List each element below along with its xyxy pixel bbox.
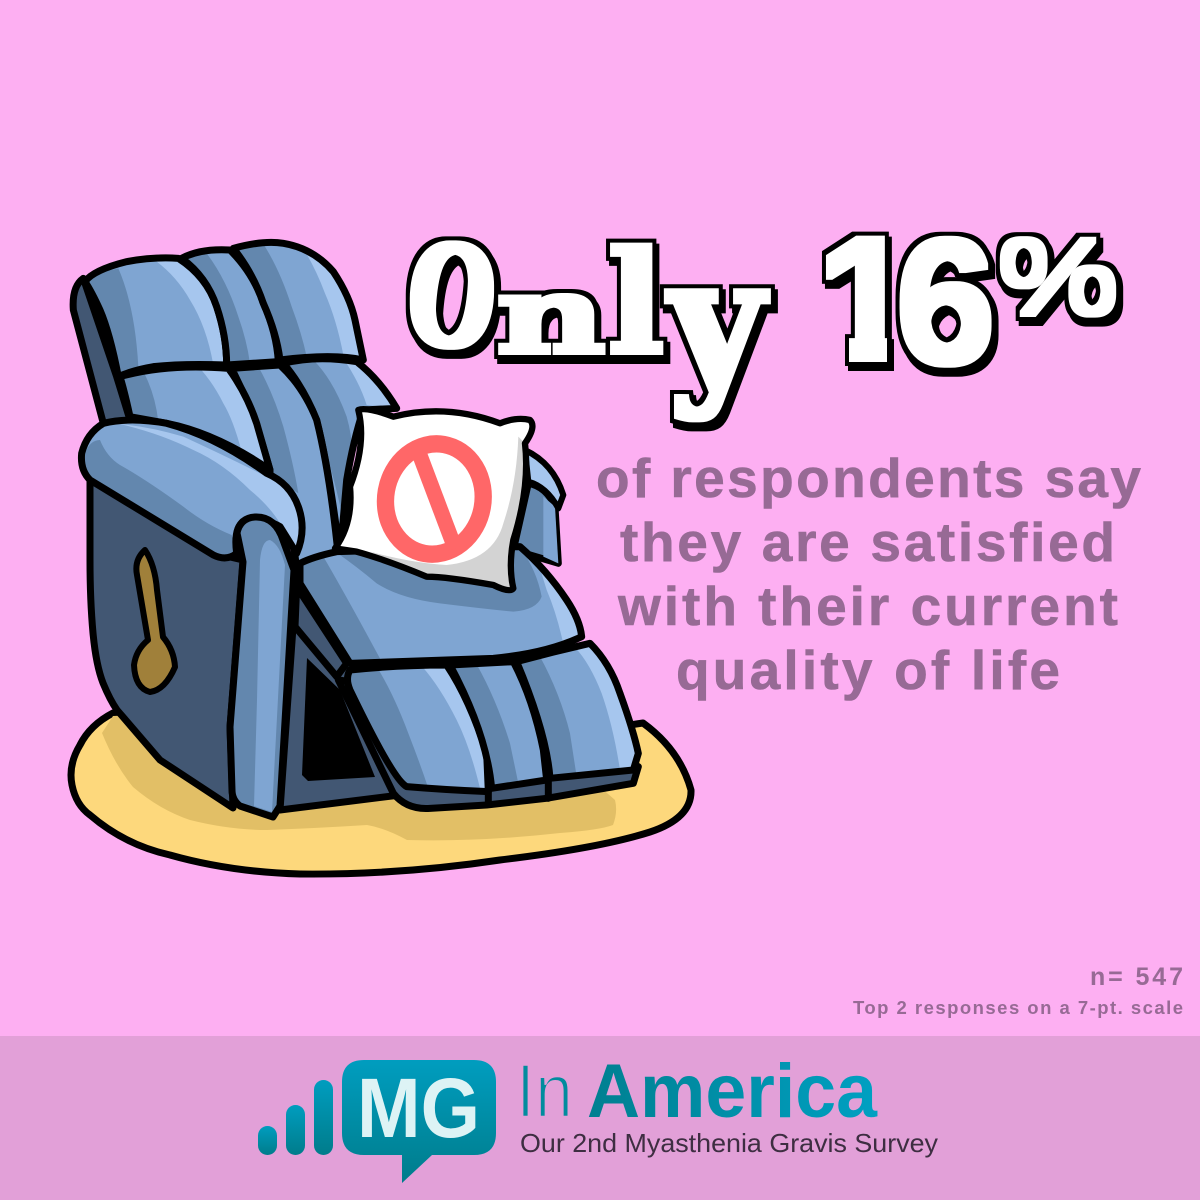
- sample size note: [853, 963, 1183, 1018]
- illustration: recliner chair on rug: [71, 242, 691, 874]
- seat cushion: [295, 547, 582, 677]
- wordmark: In: [516, 1049, 573, 1134]
- body text: [596, 447, 1141, 701]
- icon: signal bars: [258, 1080, 333, 1155]
- headline: Only 16%: y: [666, 219, 768, 422]
- headline: Only 16%: O: [401, 213, 503, 382]
- wordmark: America: [587, 1049, 878, 1134]
- headline: Only 16%: n: [496, 253, 606, 377]
- logo: [258, 1049, 938, 1183]
- headline: Only 16%: l: [608, 222, 664, 386]
- headrest: [73, 242, 363, 423]
- body text: they are satisfied: [620, 511, 1115, 573]
- back cushions: [120, 358, 397, 570]
- armrest top: [81, 420, 302, 558]
- body text: of respondents say: [596, 447, 1141, 509]
- pillow with prohibition sign: [335, 409, 532, 590]
- right armrest: [513, 450, 563, 563]
- rug: [71, 700, 691, 874]
- headline: Only 16%: 6: [896, 202, 995, 401]
- sample size note: n= 547: [1090, 963, 1183, 991]
- armrest front column: [230, 517, 294, 817]
- headline: Only 16%: 1: [817, 202, 914, 397]
- headline: Only 16%: [401, 202, 1118, 422]
- icon: prohibition sign: [377, 436, 492, 562]
- open space beneath seat: [280, 585, 420, 810]
- footrest: [338, 643, 638, 808]
- footer band: [0, 1036, 1200, 1200]
- headline: Only 16%: %: [998, 216, 1118, 337]
- icon: recliner lever: [134, 550, 175, 692]
- recliner side panel: [90, 478, 243, 808]
- tagline: Our 2nd Myasthenia Gravis Survey: [520, 1128, 938, 1158]
- body text: quality of life: [676, 639, 1060, 701]
- body text: with their current: [617, 575, 1118, 637]
- sample size note: Top 2 responses on a 7-pt. scale: [853, 997, 1183, 1018]
- icon: speech bubble: [342, 1060, 496, 1183]
- logo letters MG: MG: [357, 1061, 480, 1155]
